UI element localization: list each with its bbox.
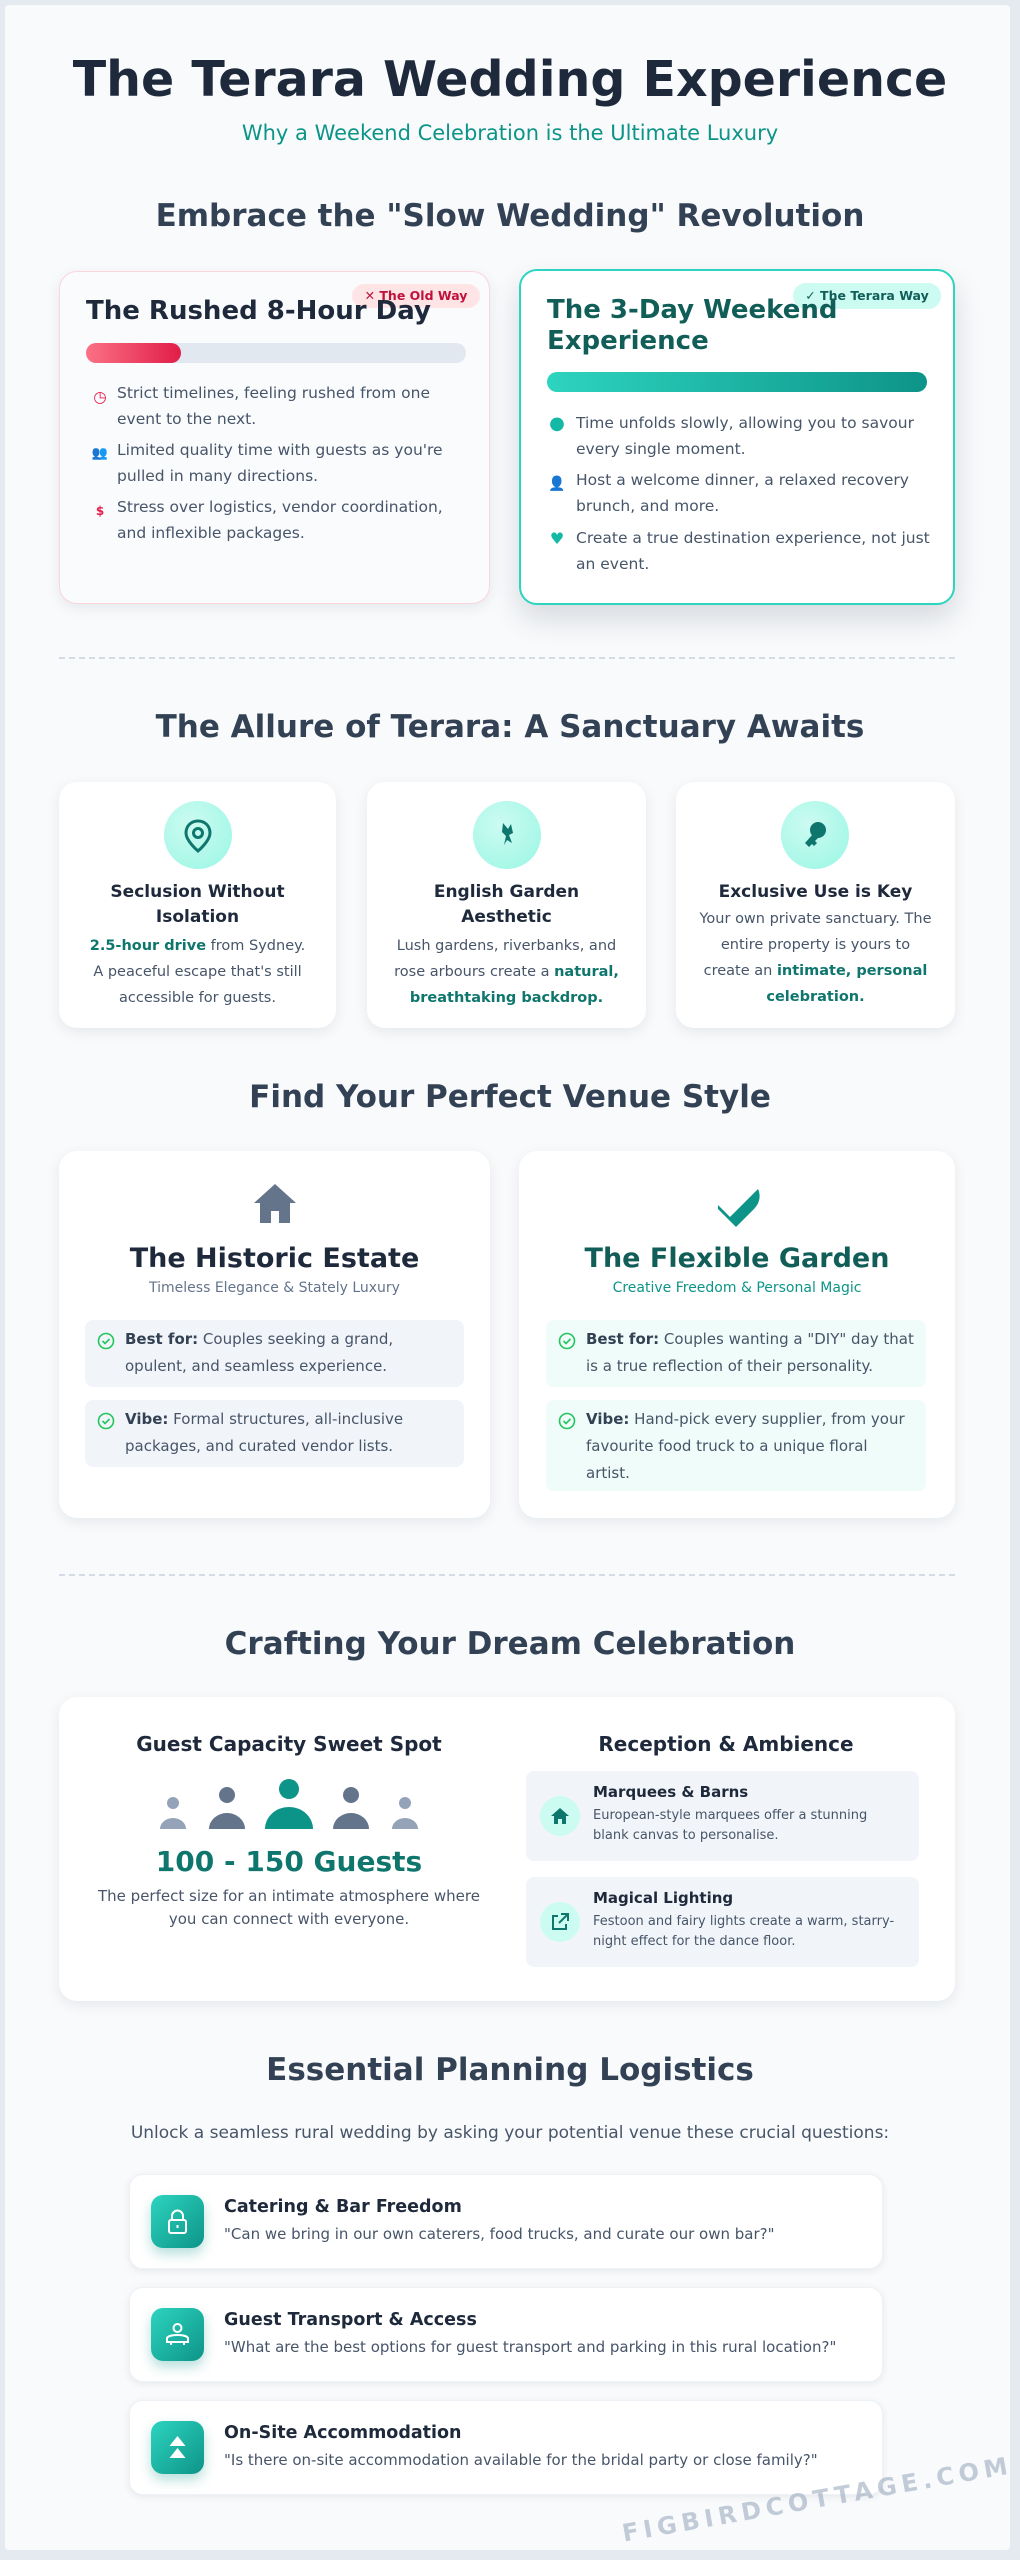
heading: allure: The Allure of Terara: A Sanctuary Awaits [156, 709, 864, 745]
panel: flexible garden [519, 1151, 955, 1518]
panel: exclusive use [676, 782, 955, 1028]
heading: crafting: Crafting Your Dream Celebration [225, 1626, 795, 1662]
list item: 👥 [92, 446, 108, 461]
logistics: accommodation [129, 2400, 883, 2495]
icon: people [160, 1779, 418, 1829]
watermark: FIGBIRDCOTTAGE.COM [620, 2451, 1015, 2548]
list item: ♥ [550, 529, 564, 548]
text: Seclusion Without Isolation [110, 882, 285, 927]
text [90, 882, 305, 1006]
list item: Stress over logistics, vendor coordination, and inflexible packages. [117, 498, 443, 542]
text: Exclusive Use is Key [719, 882, 912, 902]
subtitle: Why a Weekend Celebration is the Ultimate Luxury [242, 121, 778, 145]
text [394, 882, 619, 1006]
icon: leaf [718, 1189, 760, 1227]
icon: external [540, 1902, 580, 1942]
venue title: The Historic Estate [130, 1243, 419, 1274]
progress bar [86, 343, 466, 363]
panel: celebration [59, 1697, 955, 2001]
badge: old way: ✕ The Old Way [365, 288, 467, 303]
heading: slow wedding: Embrace the "Slow Wedding" Revolution [156, 198, 864, 234]
panel: historic estate [59, 1151, 490, 1518]
text: English Garden Aesthetic [434, 882, 579, 927]
logistics: transport: "What are the best options for guest transport and parking in this rural location?" [224, 2338, 836, 2356]
badge: terara way [793, 283, 941, 309]
logistics: accommodation: On-Site Accommodation [224, 2423, 462, 2443]
heading: venue style: Find Your Perfect Venue Style [249, 1079, 771, 1115]
card title: The Rushed 8-Hour Day [86, 296, 431, 326]
box: vibe [85, 1400, 464, 1467]
icon: transport [151, 2308, 204, 2361]
icon: lock [151, 2195, 204, 2248]
list item: ● [549, 413, 565, 434]
list item: ◷ [93, 388, 107, 406]
box: best for [546, 1320, 926, 1387]
box: vibe: Vibe: Hand-pick every supplier, from your favourite food truck to a unique floral artist. [586, 1410, 905, 1482]
title: The Terara Wedding Experience [73, 51, 947, 108]
icon: key [781, 801, 849, 869]
list item: Strict timelines, feeling rushed from one event to the next. [117, 384, 430, 428]
logistics: catering: "Can we bring in our own caterers, food trucks, and curate our own bar?" [224, 2225, 774, 2243]
item: marquees [526, 1771, 919, 1861]
box: best for: Best for: Couples seeking a grand, opulent, and seamless experience. [125, 1330, 393, 1375]
logistics: catering: Catering & Bar Freedom [224, 2197, 462, 2217]
item: lighting [526, 1877, 919, 1967]
list item: Limited quality time with guests as you're pulled in many directions. [117, 441, 443, 485]
item: lighting: Magical Lighting [593, 1889, 733, 1907]
icon: garden [473, 801, 541, 869]
list item: Create a true destination experience, not just an event. [576, 529, 930, 573]
panel: english garden [367, 782, 646, 1028]
badge: old way [352, 284, 480, 308]
badge: terara way: ✓ The Terara Way [805, 288, 929, 303]
list item: Time unfolds slowly, allowing you to savour every single moment. [576, 414, 914, 458]
box: best for [85, 1320, 464, 1387]
list item: $ [96, 504, 104, 518]
venue subtitle: Creative Freedom & Personal Magic [613, 1280, 861, 1296]
icon: house [254, 1184, 296, 1223]
list item: 👤 [548, 476, 566, 492]
logistics: accommodation: "Is there on-site accommodation available for the bridal party or close family?" [224, 2451, 818, 2469]
list item: Host a welcome dinner, a relaxed recovery brunch, and more. [576, 471, 909, 515]
icon: home [540, 1796, 580, 1836]
text: Lush gardens, riverbanks, and rose arbours create a natural, breathtaking backdrop. [394, 938, 619, 1006]
logistics: transport: Guest Transport & Access [224, 2310, 477, 2330]
reception title: Reception & Ambience [598, 1732, 854, 1756]
venue title: The Flexible Garden [585, 1243, 889, 1274]
venue subtitle: Timeless Elegance & Stately Luxury [149, 1280, 400, 1296]
box: vibe: Vibe: Formal structures, all-inclusive packages, and curated vendor lists. [125, 1410, 403, 1455]
panel: seclusion [59, 782, 336, 1028]
icon: chevrons [151, 2421, 204, 2474]
logistics: catering [129, 2174, 883, 2269]
text: Your own private sanctuary. The entire property is yours to create an intimate, personal celebration. [700, 911, 932, 1005]
intro text: Unlock a seamless rural wedding by asking your potential venue these crucial questions: [131, 2123, 889, 2143]
text: 2.5-hour drive from Sydney. A peaceful escape that's still accessible for guests. [90, 938, 305, 1006]
capacity text: The perfect size for an intimate atmosphere where you can connect with everyone. [98, 1887, 480, 1928]
capacity number: 100 - 150 Guests [156, 1845, 422, 1878]
panel: 3-day weekend [519, 269, 955, 605]
logistics: transport [129, 2287, 883, 2382]
capacity title: Guest Capacity Sweet Spot [136, 1732, 442, 1756]
item: lighting: Festoon and fairy lights create a warm, starry-night effect for the dance floor. [593, 1914, 894, 1949]
progress bar [547, 372, 927, 392]
item: marquees: European-style marquees offer a stunning blank canvas to personalise. [593, 1808, 867, 1843]
capacity column [98, 1732, 480, 1928]
card title: The 3-Day Weekend Experience [547, 295, 838, 356]
heading: logistics: Essential Planning Logistics [266, 2052, 754, 2088]
box: vibe [546, 1400, 926, 1491]
panel: rushed day [59, 271, 490, 604]
item: marquees: Marquees & Barns [593, 1783, 748, 1801]
box: best for: Best for: Couples wanting a "DIY" day that is a true reflection of their personality. [586, 1330, 914, 1375]
icon: location pin [164, 801, 232, 869]
